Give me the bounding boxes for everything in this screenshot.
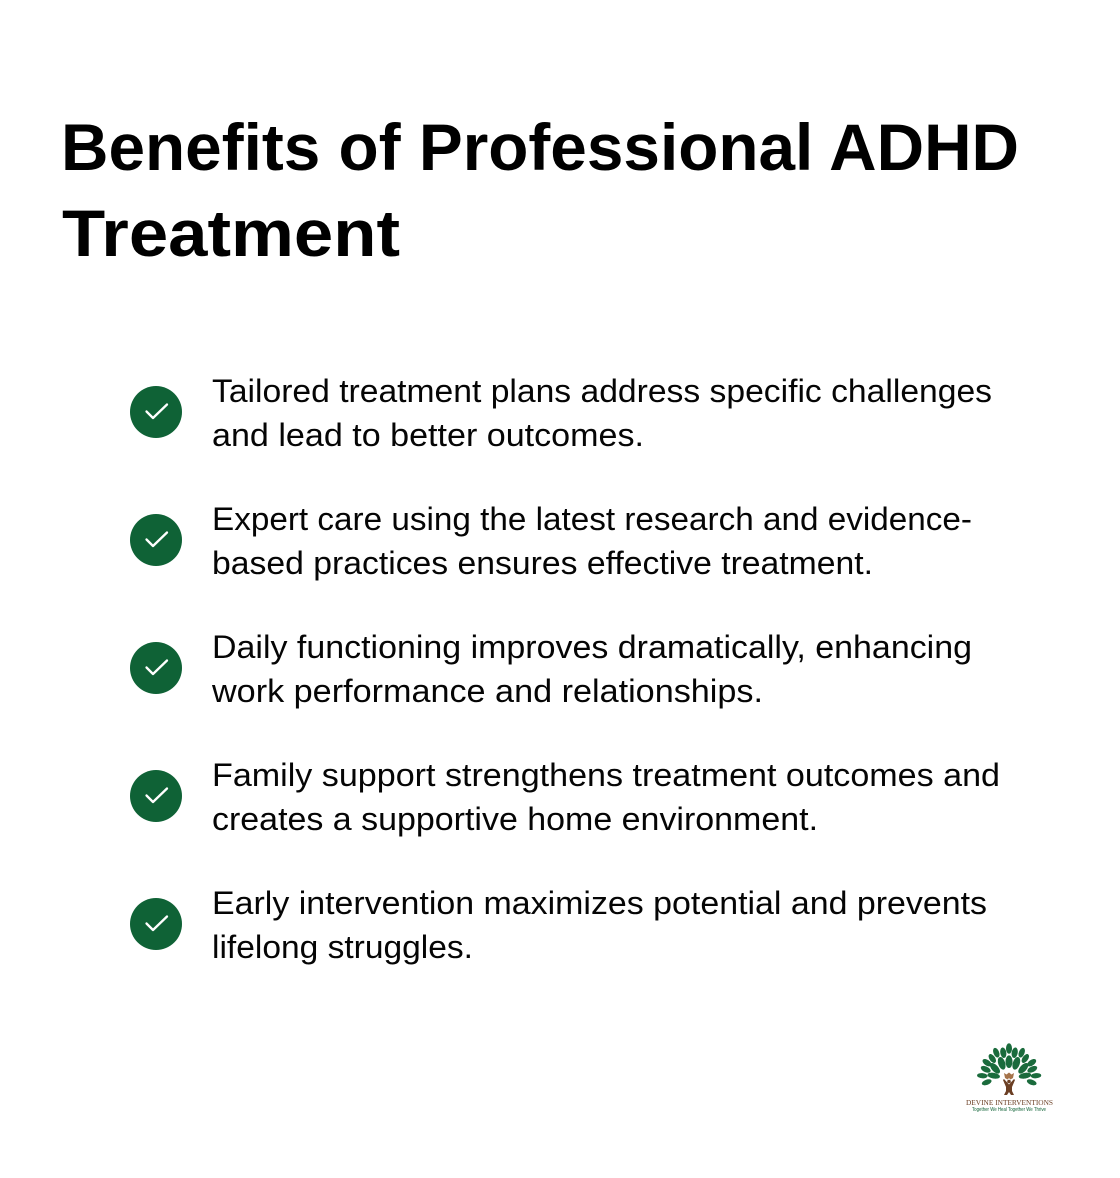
list item: tailored treatment (130, 373, 992, 453)
item text: Expert care using the latest research and evidence- (212, 501, 972, 537)
item text (212, 757, 1000, 837)
list item: family support (130, 757, 1000, 837)
icon: check circle (130, 386, 182, 438)
list item: daily functioning (130, 629, 972, 709)
icon: check circle (130, 770, 182, 822)
list item: expert care (130, 501, 972, 581)
title (61, 110, 1019, 270)
item text: based practices ensures effective treatment. (212, 545, 873, 581)
icon: tree leaves (977, 1044, 1041, 1086)
list item: early intervention (130, 885, 987, 965)
item text: Family support strengthens treatment outcomes and (212, 757, 1000, 793)
icon: check circle (130, 898, 182, 950)
item text: and lead to better outcomes. (212, 417, 644, 453)
item text: Early intervention maximizes potential and prevents (212, 885, 987, 921)
logo: Devine Interventions (966, 1044, 1053, 1113)
icon: figure trunk (1003, 1072, 1015, 1095)
item text (212, 501, 972, 581)
benefits list (130, 373, 1000, 965)
logo name: DEVINE INTERVENTIONS (966, 1098, 1053, 1107)
icon: check circle (130, 514, 182, 566)
item text: creates a supportive home environment. (212, 801, 818, 837)
icon: check circle (130, 642, 182, 694)
title: Treatment (62, 196, 400, 270)
item text: work performance and relationships. (211, 673, 763, 709)
item text (212, 885, 987, 965)
logo tagline: Together We Heal Together We Thrive (972, 1107, 1046, 1113)
item text: lifelong struggles. (212, 929, 473, 965)
title: Benefits of Professional ADHD (61, 110, 1019, 184)
item text: Tailored treatment plans address specific challenges (212, 373, 992, 409)
item text (212, 373, 992, 453)
item text: Daily functioning improves dramatically, enhancing (212, 629, 972, 665)
item text (211, 629, 972, 709)
